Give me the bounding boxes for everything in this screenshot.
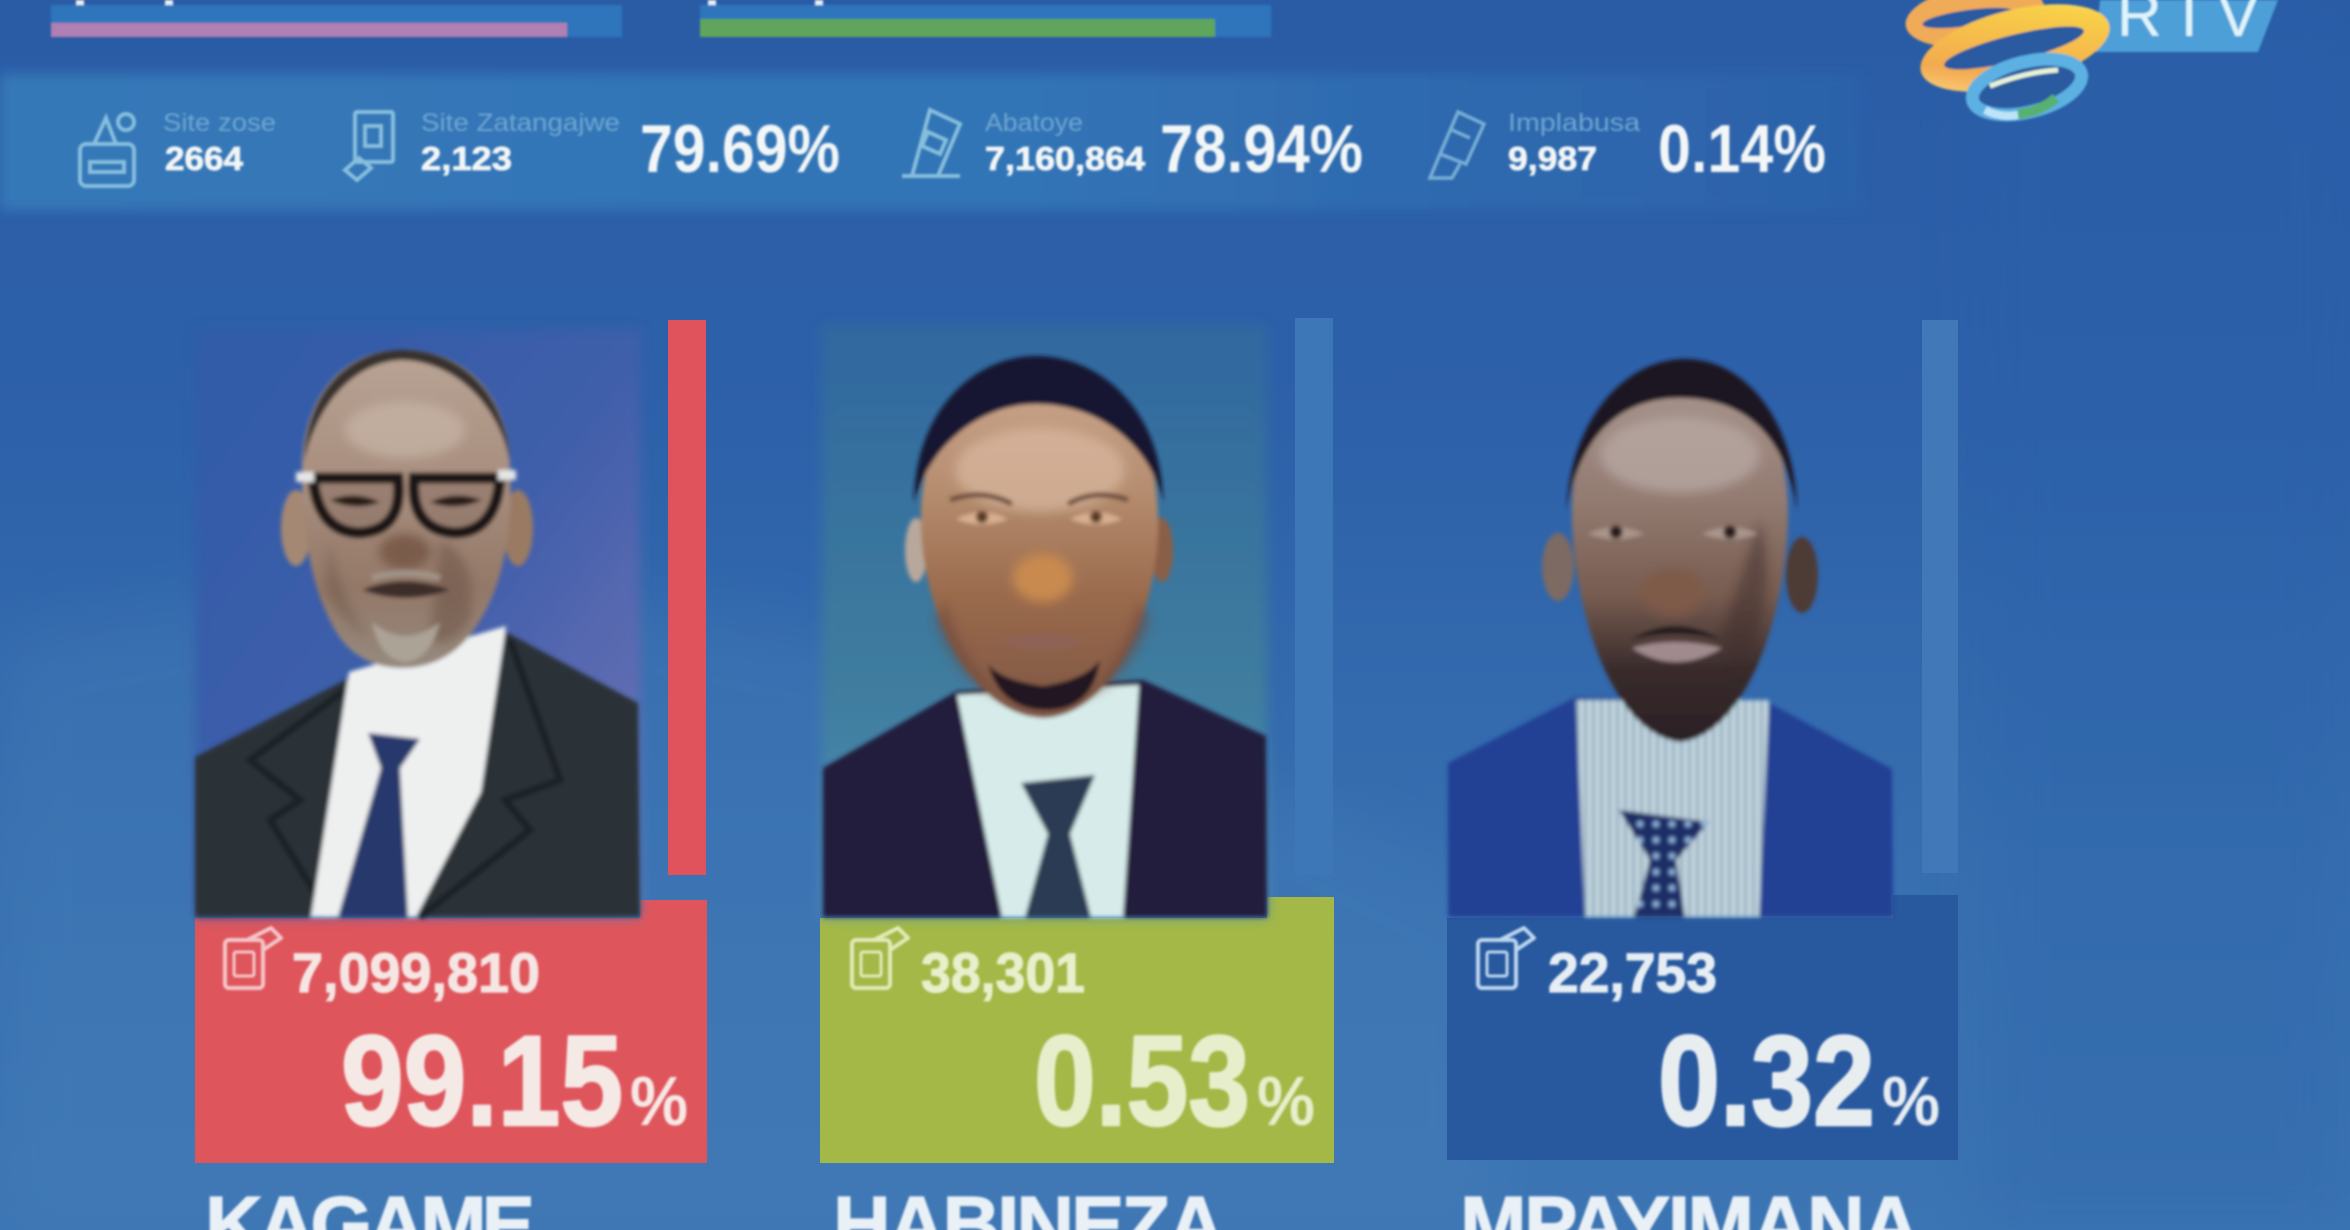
icon: ballot in box [902,110,960,176]
ballot count [225,928,540,1004]
logo rings [1902,0,2118,125]
stat: voters: 7,160,864 [985,140,1146,177]
candidate: Kagame [195,320,707,1230]
tie [1619,810,1709,917]
eyes [956,512,1122,524]
candidate: Mpayimana [1447,320,1958,1230]
ears [1542,533,1574,601]
stat: sites counted [345,109,840,187]
suit [823,680,1267,917]
mouth [1630,626,1722,640]
stat: voters [902,109,1363,187]
hair [304,350,510,462]
stat: sites counted: 79.69% [640,111,840,187]
face shading [935,428,1150,700]
icon: ballot box [852,928,908,988]
icon: ballot sheet [345,112,393,180]
mouth [1000,634,1086,651]
logo: RTV [1902,0,2278,125]
ballot count [852,928,1085,1004]
shirt [957,685,1139,917]
ears [281,490,311,566]
candidate: Habineza [820,318,1334,1230]
percentage: 0.32 [1658,1010,1875,1153]
suit [195,632,640,917]
percentage: % [1882,1062,1940,1140]
statistics strip [0,74,1860,210]
percentage: % [630,1062,688,1140]
shirt [311,626,506,917]
icon: torn ballot [1430,112,1484,178]
icon: ballot box [1478,928,1534,988]
vote share bar [1295,318,1333,875]
clipped caption marks [76,0,823,5]
vote share bar [1922,320,1958,873]
result panel [820,897,1334,1163]
ballot count: 38,301 [921,941,1085,1004]
stat: all sites: Site zose [163,109,276,137]
ballot count [1478,928,1717,1004]
head [1572,375,1788,742]
glasses [313,478,500,533]
icon: ballot box [80,114,134,186]
portrait [1448,359,1893,917]
suit [1448,697,1893,917]
bar: pink progress [51,5,622,37]
tie [1021,775,1095,917]
stat: invalid ballots: 0.14% [1658,111,1826,187]
stat: all sites: 2664 [165,140,244,177]
ballot count: 22,753 [1548,941,1717,1004]
top progress bars [51,0,1271,37]
stat: sites counted: Site Zatangajwe [421,109,620,137]
stat: invalid ballots [1430,109,1826,187]
head [921,372,1158,718]
face shading [1600,417,1767,680]
percentage: 99.15 [341,1010,623,1153]
portrait [822,325,1267,917]
ears [905,518,927,582]
mouth and goatee [362,581,450,598]
eyes [1588,527,1758,539]
result panel [1447,895,1958,1160]
vote share bar [668,320,706,875]
percentage: 0.53 [1034,1010,1250,1153]
stat: voters: 78.94% [1160,111,1363,187]
stat: invalid ballots: Implabusa [1508,109,1640,137]
portrait [195,330,640,917]
bar: green progress [700,5,1271,37]
face shading [325,402,472,642]
beard [988,660,1100,710]
stat: invalid ballots: 9,987 [1508,140,1597,177]
stat: voters: Abatoye [985,109,1083,137]
ballot count: 7,099,810 [292,941,540,1004]
tie [338,733,420,917]
percentage: % [1257,1062,1315,1140]
hair [914,356,1163,502]
shirt [1576,700,1769,917]
stat: sites counted: 2,123 [421,140,512,177]
head [302,350,510,668]
stat: all sites [80,109,276,186]
result panel [195,900,707,1163]
icon: ballot box [225,928,281,988]
hair [1567,359,1797,510]
